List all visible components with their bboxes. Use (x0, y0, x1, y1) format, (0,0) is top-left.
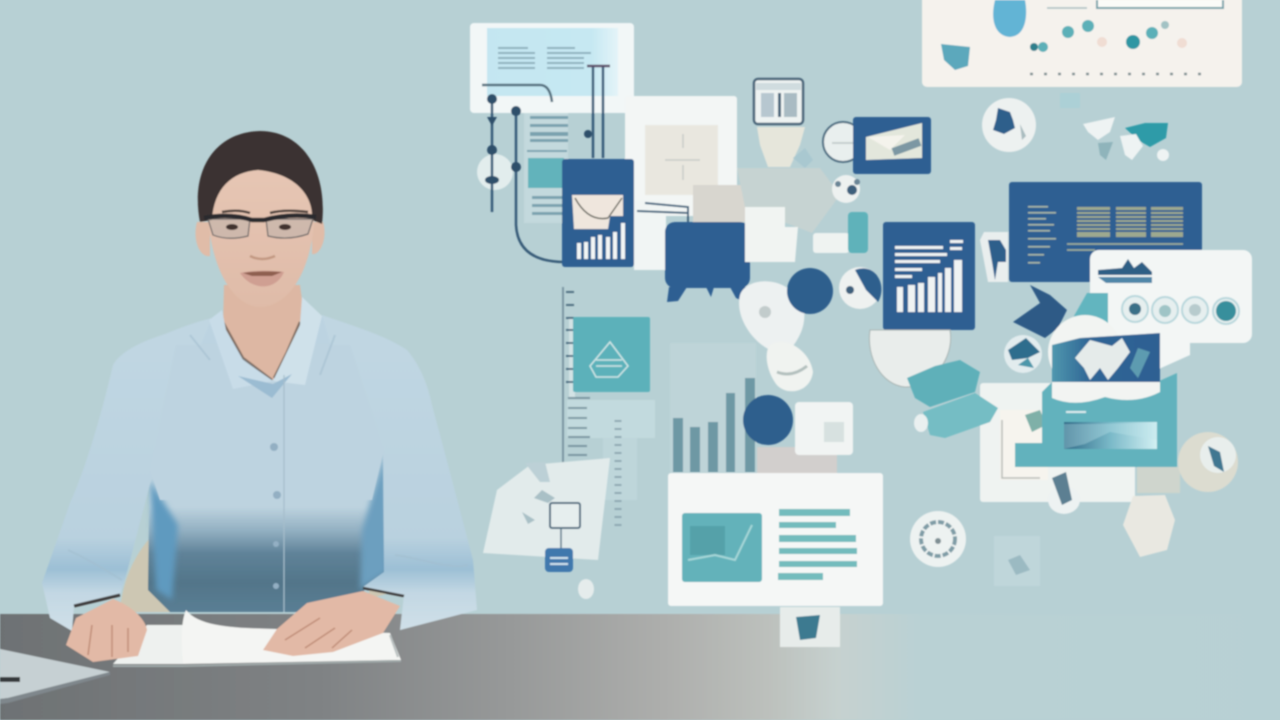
eyes (226, 224, 291, 230)
side shadow left (150, 480, 178, 600)
open book (113, 610, 401, 666)
right hand (263, 591, 400, 656)
floating pale blocks (745, 207, 868, 262)
icon: white cluster (739, 281, 813, 391)
neck shadow (223, 322, 300, 380)
icon: faint tile below dashboard (1060, 93, 1080, 108)
panel: small white square (795, 402, 853, 455)
desk (0, 614, 1280, 720)
ears (195, 222, 325, 256)
person icon beside table (980, 232, 1008, 282)
icon: pale circle (869, 330, 951, 387)
panel: navy bar chart card (883, 222, 975, 330)
panel: large white report card (668, 473, 883, 606)
icon: faint map tile (994, 536, 1040, 586)
panel: pale sketch card (483, 458, 610, 599)
icon: navy and white flower (839, 267, 881, 309)
panel: teal report (1015, 315, 1177, 467)
shirt torso (148, 315, 385, 612)
icon: navy blob (787, 268, 833, 314)
head (208, 165, 314, 307)
icon: small flower (832, 175, 860, 203)
hair (198, 131, 323, 224)
panel: white card centre top (625, 96, 840, 270)
icon: navy map fragments (1004, 285, 1108, 373)
laptop (0, 649, 110, 704)
person (42, 131, 477, 631)
neck (223, 285, 302, 380)
icons: pale right side (1048, 432, 1238, 557)
panel: navy data table (1009, 182, 1202, 282)
left wrist band (74, 595, 120, 606)
panel: small navy card (853, 117, 931, 174)
icon: small tablet (754, 79, 813, 168)
shirt placket and buttons (270, 375, 284, 612)
icon: large globe (982, 98, 1036, 152)
right sleeve (322, 315, 477, 630)
shirt collar (209, 297, 322, 398)
icon: bottom thumbnail (780, 607, 840, 647)
chart: translucent bar chart (670, 343, 837, 473)
nose and mouth (240, 256, 284, 286)
left sleeve (42, 318, 212, 631)
panel: top document (470, 23, 634, 113)
icon: gear badge (910, 511, 966, 567)
glasses (204, 211, 316, 238)
icon: round gauge (823, 122, 863, 162)
chair back (120, 538, 175, 612)
panel: lower left document (524, 113, 568, 223)
panel: top right dashboard (922, 0, 1242, 87)
blob behind connector (477, 154, 513, 190)
panel: white report behind teal (980, 383, 1135, 502)
connector lines (482, 66, 688, 262)
shoulder and chest fill (150, 345, 384, 500)
side shadow right (360, 450, 388, 590)
right wrist band (363, 588, 404, 596)
icon: teal brush shapes (907, 360, 998, 438)
scale ruler and teal panel (563, 287, 655, 530)
panel: white metrics card (1090, 250, 1252, 373)
shirt folds (68, 335, 468, 580)
icon: navy speech bubble (665, 222, 750, 303)
icon: world map fragments (1083, 117, 1169, 161)
panel: navy chart card (562, 159, 634, 267)
icon: navy circle (743, 395, 793, 445)
left hand (66, 599, 147, 662)
